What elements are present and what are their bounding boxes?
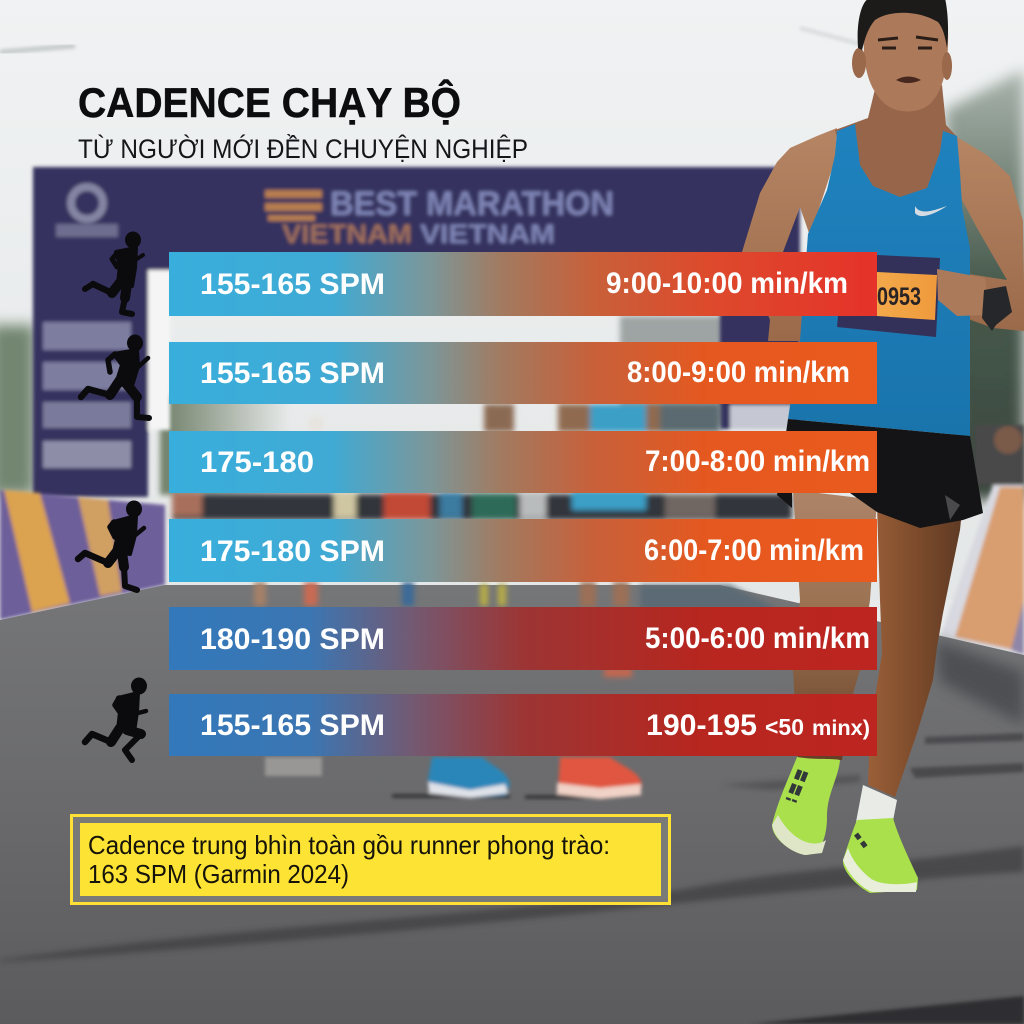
background: road	[0, 585, 1024, 1024]
background: start gantry banner: VIETNAM	[282, 219, 412, 249]
row 1: cadence bar	[169, 252, 877, 316]
row 3: cadence bar	[169, 431, 877, 493]
sock	[856, 785, 897, 826]
callout: average cadence: Cadence trung bhìn toàn gồu runner phong trào:	[88, 830, 610, 860]
background: start gantry banner: VIETNAM	[420, 219, 555, 249]
background: lane marking	[265, 757, 322, 776]
back leg	[793, 490, 877, 760]
callout: average cadence: 163 SPM (Garmin 2024)	[88, 859, 349, 889]
row 6: cadence bar	[169, 694, 877, 756]
row 4: cadence bar: 175-180 SPM	[200, 535, 385, 568]
row 1: cadence bar: 9:00-10:00 min/km	[606, 267, 848, 300]
title: CADENCE CHẠY BỘ	[78, 78, 461, 126]
callout: average cadence	[72, 816, 670, 904]
row 4: cadence bar: 6:00-7:00 min/km	[644, 534, 864, 567]
row 3: cadence bar: 175-180	[200, 446, 314, 479]
row 4: cadence bar	[169, 519, 877, 582]
background: start gantry banner: BEST MARATHON	[330, 185, 614, 223]
icon: runner 4	[85, 678, 147, 760]
row 5: cadence bar	[169, 607, 877, 670]
row 2: cadence bar: 155-165 SPM	[200, 357, 385, 390]
icon: runner 2	[81, 334, 149, 418]
row 5: cadence bar: 180-190 SPM	[200, 623, 385, 656]
blue singlet	[788, 124, 970, 436]
row 6: cadence bar: 190-195	[646, 709, 757, 742]
left arm	[742, 128, 837, 341]
row 6: cadence bar: 155-165 SPM	[200, 709, 385, 742]
row 6: cadence bar: <50	[765, 714, 804, 740]
row 6: cadence bar: minx)	[812, 717, 870, 740]
front leg	[868, 505, 962, 797]
background: blurred crowd	[172, 404, 792, 677]
icon: runner 1	[85, 232, 143, 314]
lead runner figure: 0953	[877, 283, 921, 311]
logo on singlet	[915, 206, 947, 216]
right hand and watch	[937, 269, 990, 316]
row 2: cadence bar: 8:00-9:00 min/km	[627, 356, 850, 389]
back shoe	[772, 757, 840, 855]
row 1: cadence bar: 155-165 SPM	[200, 268, 385, 301]
row 2: cadence bar	[169, 342, 877, 404]
black shorts	[777, 419, 983, 528]
front shoe	[843, 818, 918, 893]
subtitle: TỪ NGƯỜI MỚI ĐỀN CHUYỆN NGHIỆP	[78, 133, 528, 164]
race bib	[837, 255, 940, 337]
lead runner figure	[742, 0, 1024, 893]
icon: runner 3	[78, 500, 144, 590]
head	[864, 8, 948, 112]
blurred runners upper bodies	[484, 404, 514, 432]
chest and neck	[835, 85, 960, 200]
background: blurred shoes	[392, 757, 642, 799]
right arm	[937, 136, 1024, 331]
background: road barriers	[0, 425, 1024, 655]
background: start gantry banner	[33, 167, 800, 497]
row 3: cadence bar: 7:00-8:00 min/km	[645, 445, 870, 478]
row 5: cadence bar: 5:00-6:00 min/km	[645, 622, 870, 655]
blurred runners legs	[254, 582, 266, 606]
